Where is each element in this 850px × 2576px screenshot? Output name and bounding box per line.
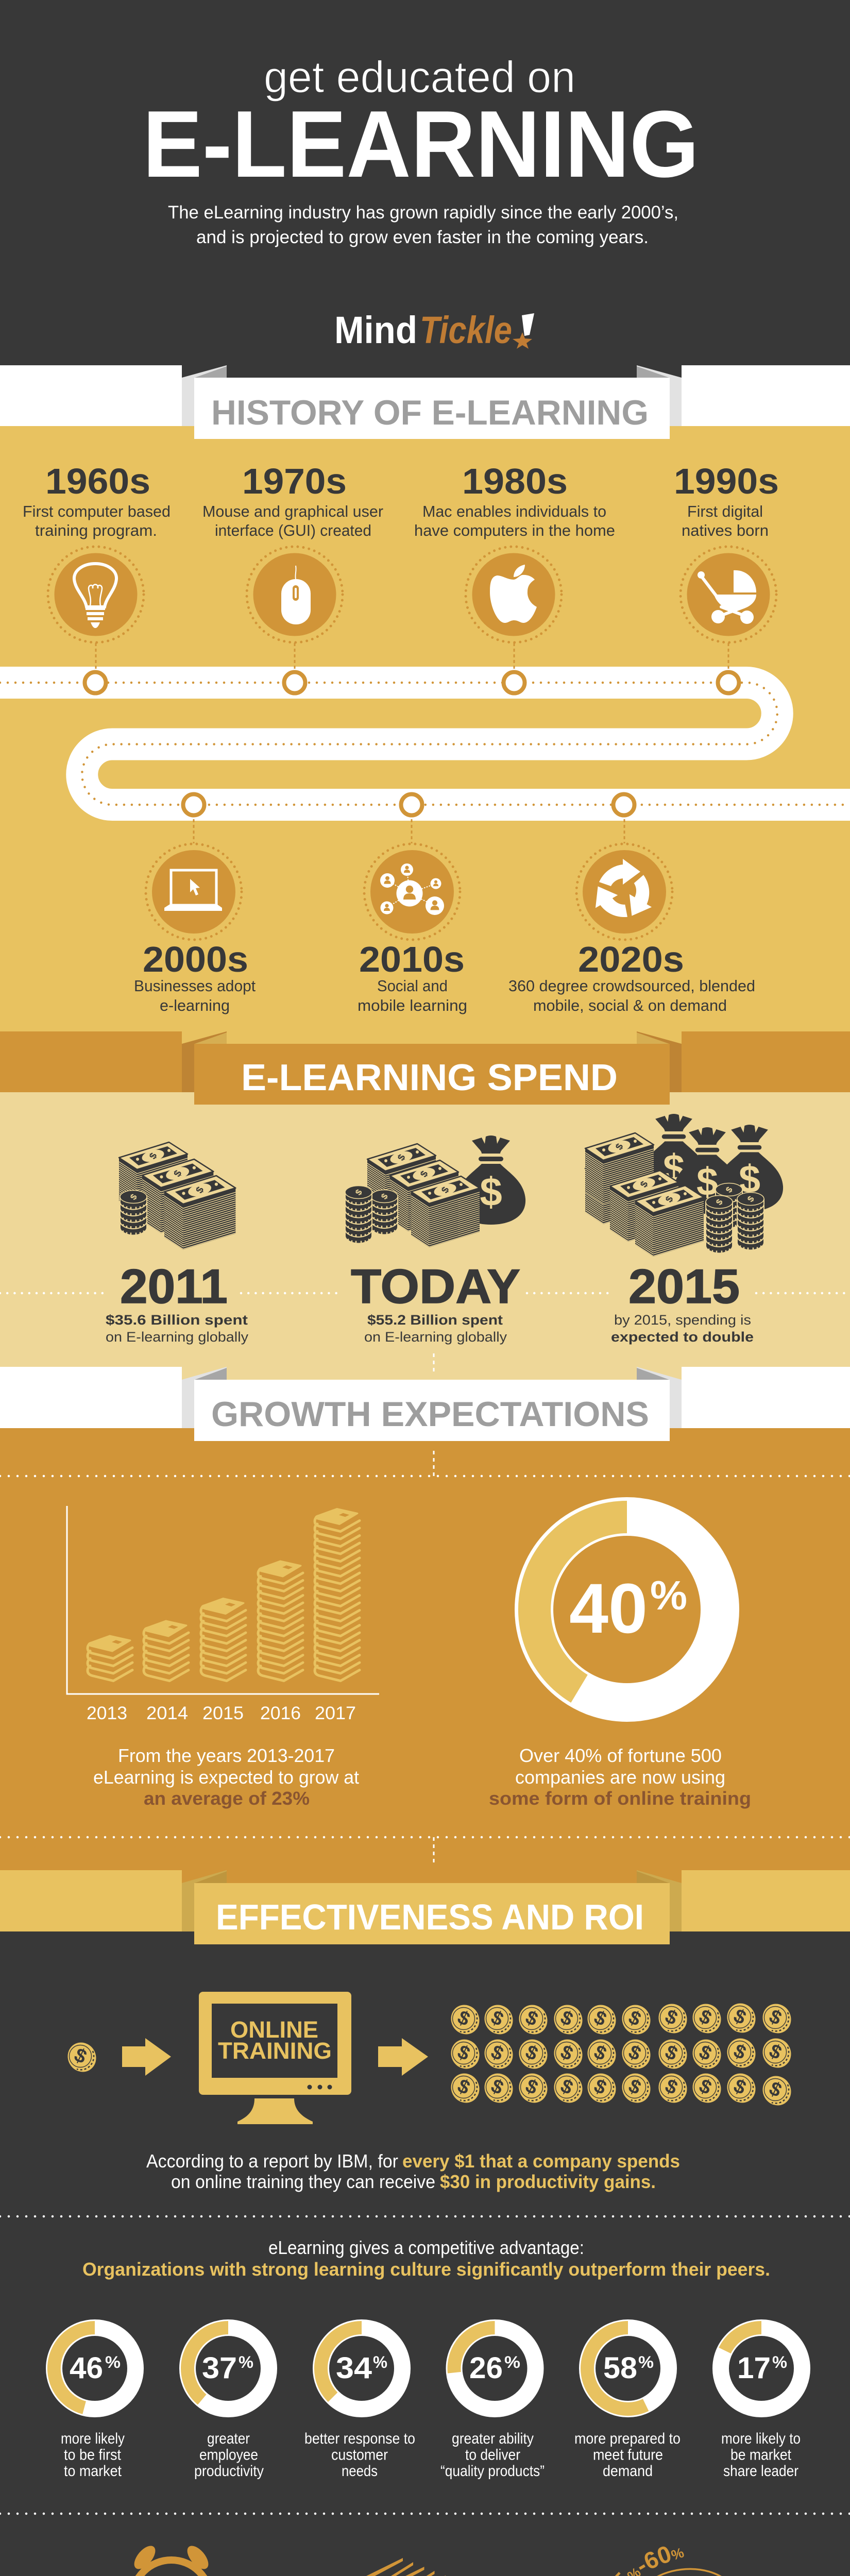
stat: 2015: expected to double xyxy=(611,1329,754,1345)
panel: effectiveness background xyxy=(0,1931,850,2576)
stat: 34% customer needs: 34 xyxy=(336,2351,372,2385)
stat: 37% employee productivity xyxy=(181,2321,269,2480)
stat: 46% first to market: more likely xyxy=(61,2430,125,2447)
milestone: 1990s xyxy=(674,461,779,642)
stat: today xyxy=(351,1259,520,1345)
milestone: 1960s: training program. xyxy=(35,521,157,539)
text: IBM report xyxy=(146,2150,680,2192)
panel: history background xyxy=(0,426,850,1092)
milestone: 2000s: Businesses adopt xyxy=(134,977,256,995)
milestone: 2010s: Social and xyxy=(377,977,448,995)
milestone: 2010s: mobile learning xyxy=(358,996,467,1014)
text: fortune 500: some form of online training xyxy=(489,1788,751,1809)
stat: 46% first to market: to market xyxy=(64,2463,122,2480)
stat: 2015: by 2015, spending is xyxy=(614,1312,751,1328)
stat: 58% future demand: % xyxy=(638,2353,654,2371)
arrow: coin to monitor xyxy=(122,2038,171,2076)
stat: today: TODAY xyxy=(351,1259,520,1313)
milestone: 1970s: Mouse and graphical user xyxy=(202,502,383,520)
stat: 37% employee productivity: productivity xyxy=(194,2463,264,2480)
text: fortune 500 xyxy=(489,1745,751,1809)
stat: 37% employee productivity: employee xyxy=(199,2446,258,2464)
stat: 26% quality products: “quality products” xyxy=(440,2463,545,2480)
stat: 26% quality products: % xyxy=(504,2353,520,2371)
dotted line: spend years xyxy=(0,1292,850,1294)
milestone: 1990s: natives born xyxy=(682,521,769,539)
stat: today: $55.2 Billion spent xyxy=(367,1312,503,1328)
icon: single coin xyxy=(62,2037,101,2077)
stat: 58% future demand: 58 xyxy=(603,2351,637,2385)
stat: 2011 xyxy=(106,1259,249,1345)
intro text xyxy=(168,202,678,247)
intro text: The eLearning industry has grown rapidly since the early 2000’s, xyxy=(168,202,678,223)
stat: 17% market share xyxy=(719,2321,802,2480)
stat: 34% customer needs: better response to xyxy=(304,2430,415,2447)
text: competitive advantage: eLearning gives a competitive advantage: xyxy=(268,2237,584,2258)
milestone: 1980s xyxy=(414,461,615,642)
stat: 2015: 2015 xyxy=(628,1259,740,1313)
arrow: monitor to coins xyxy=(378,2038,428,2076)
dashed connectors xyxy=(433,1353,435,1865)
icon: thirty coins xyxy=(446,1998,796,2111)
logo: MindTickle: Mind xyxy=(334,309,417,351)
milestone: 1990s: First digital xyxy=(687,502,763,520)
milestone: 2000s: 2000s xyxy=(143,939,248,979)
stat: 37% employee productivity: % xyxy=(239,2353,253,2371)
milestone: 2010s: 2010s xyxy=(359,939,465,979)
banner: effectiveness and roi xyxy=(0,1870,850,1944)
milestone: 2020s: mobile, social & on demand xyxy=(533,996,727,1014)
stat: 26% quality products: greater ability xyxy=(452,2430,534,2447)
stat: 58% future demand xyxy=(574,2321,681,2480)
stat: 34% customer needs: needs xyxy=(342,2463,378,2480)
text: fortune 500: companies are now using xyxy=(515,1767,725,1788)
text: IBM report: $30 in productivity gains. xyxy=(440,2171,656,2192)
text: IBM report: According to a report by IBM, for xyxy=(146,2150,398,2172)
banner: growth expectations xyxy=(0,1367,850,1441)
milestone: 2000s: e-learning xyxy=(160,996,230,1014)
text: IBM report: every $1 that a company spends xyxy=(402,2150,680,2172)
chart: 40% donut: % xyxy=(650,1572,687,1618)
icon: alarm clock 40%-60% xyxy=(134,2546,208,2576)
panel: header background xyxy=(0,0,850,365)
milestone: 1980s: Mac enables individuals to xyxy=(422,502,606,520)
milestone: 2000s xyxy=(134,844,256,1014)
dotted lines: effectiveness section xyxy=(0,2216,850,2514)
banner: effectiveness and roi: EFFECTIVENESS AND ROI xyxy=(216,1897,644,1937)
stat: 17% market share: 17 xyxy=(737,2351,771,2385)
stat: 2015 xyxy=(611,1259,754,1345)
stat: 2011: on E-learning globally xyxy=(106,1329,249,1345)
text: competitive advantage xyxy=(82,2237,770,2280)
milestone: 1980s: have computers in the home xyxy=(414,521,615,539)
icon: today money stacks and bag xyxy=(345,1136,525,1247)
bar chart: book stacks: 2013 xyxy=(87,1703,127,1723)
milestone: 1970s: interface (GUI) created xyxy=(215,521,371,539)
banner: growth expectations: GROWTH EXPECTATIONS xyxy=(211,1395,649,1434)
stat: 37% employee productivity: 37 xyxy=(202,2351,237,2385)
text: growth average xyxy=(93,1745,359,1809)
milestone: 1970s: 1970s xyxy=(242,461,347,501)
banner: history of e-learning: HISTORY OF E-LEARNING xyxy=(211,393,649,432)
bar chart: book stacks: 2014 xyxy=(146,1703,188,1723)
stat: 46% first to market: 46 xyxy=(70,2351,103,2385)
stat: 17% market share: more likely to xyxy=(721,2430,801,2447)
title: E-LEARNING: E-LEARNING xyxy=(143,91,699,197)
stat: 17% market share: be market xyxy=(730,2446,792,2464)
stat: 17% market share: share leader xyxy=(723,2463,798,2480)
stat: today: on E-learning globally xyxy=(364,1329,507,1345)
milestone: 1960s: 1960s xyxy=(45,461,150,501)
stat: 2011: 2011 xyxy=(120,1259,228,1313)
text: growth average: eLearning is expected to grow at xyxy=(93,1767,359,1788)
stat: 34% customer needs: customer xyxy=(331,2446,388,2464)
bar chart: book stacks: 2015 xyxy=(202,1703,244,1723)
milestone: 1990s: 1990s xyxy=(674,461,779,501)
bar chart: book stacks xyxy=(67,1506,379,1723)
milestone: 1980s: 1980s xyxy=(462,461,568,501)
logo: MindTickle xyxy=(334,309,534,351)
milestone: 2020s: 2020s xyxy=(578,939,684,979)
stat: 58% future demand: more prepared to xyxy=(574,2430,681,2447)
chart: 40% donut: 40 xyxy=(569,1569,648,1648)
panel: spend background xyxy=(0,1092,850,1428)
bar chart: book stacks: 2017 xyxy=(315,1703,356,1723)
icon: online training monitor: ONLINE xyxy=(230,2016,318,2043)
panel: growth background xyxy=(0,1428,850,1931)
icon: online training monitor xyxy=(199,1992,351,2124)
chart: 40% donut xyxy=(518,1501,720,1703)
stat: 46% first to market xyxy=(47,2321,135,2480)
milestone: 2020s: 360 degree crowdsourced, blended xyxy=(508,977,755,995)
stat: 26% quality products: 26 xyxy=(469,2351,503,2385)
stat: 58% future demand: meet future xyxy=(593,2446,663,2464)
stat: 58% future demand: demand xyxy=(603,2463,653,2480)
milestone: 1970s xyxy=(202,461,383,642)
banner: e-learning spend: E-LEARNING SPEND xyxy=(241,1057,618,1098)
banner: e-learning spend xyxy=(0,1031,850,1105)
stat: 26% quality products: to deliver xyxy=(465,2446,520,2464)
text: IBM report: on online training they can receive xyxy=(171,2171,435,2192)
stat: 17% market share: % xyxy=(772,2353,787,2371)
stat: 34% customer needs xyxy=(304,2321,415,2480)
milestone: 2020s xyxy=(508,844,755,1014)
stat: 46% first to market: % xyxy=(105,2353,121,2371)
icon: 2011 money stacks xyxy=(119,1142,235,1250)
milestone: 1960s: First computer based xyxy=(23,502,171,520)
icon: light bulb 25%-60% xyxy=(615,2546,722,2576)
stat: 2011: $35.6 Billion spent xyxy=(106,1312,248,1328)
icon: online training monitor: TRAINING xyxy=(218,2038,332,2064)
logo: MindTickle: Tickle xyxy=(420,309,512,351)
banner: history of e-learning xyxy=(0,365,850,439)
text: growth average: an average of 23% xyxy=(144,1788,310,1809)
text: fortune 500: Over 40% of fortune 500 xyxy=(519,1745,722,1766)
title: get educated on: get educated on xyxy=(264,53,575,102)
milestone: 1960s xyxy=(23,461,171,642)
timeline road xyxy=(0,643,850,843)
icon: five books 5x xyxy=(336,2558,499,2576)
text: growth average: From the years 2013-2017 xyxy=(118,1745,335,1766)
dotted lines: growth section xyxy=(0,1476,850,1837)
bar chart: book stacks: 2016 xyxy=(260,1703,301,1723)
stat: 46% first to market: to be first xyxy=(64,2446,122,2464)
text: competitive advantage: Organizations with strong learning culture significantly outperform their peers. xyxy=(82,2259,770,2280)
stat: 34% customer needs: % xyxy=(373,2353,387,2371)
stat: 26% quality products xyxy=(440,2321,545,2480)
stat: 37% employee productivity: greater xyxy=(207,2430,250,2447)
icon: 2015 money stacks and bags xyxy=(585,1114,783,1257)
intro text: and is projected to grow even faster in the coming years. xyxy=(196,227,649,247)
milestone: 2010s xyxy=(358,844,467,1014)
